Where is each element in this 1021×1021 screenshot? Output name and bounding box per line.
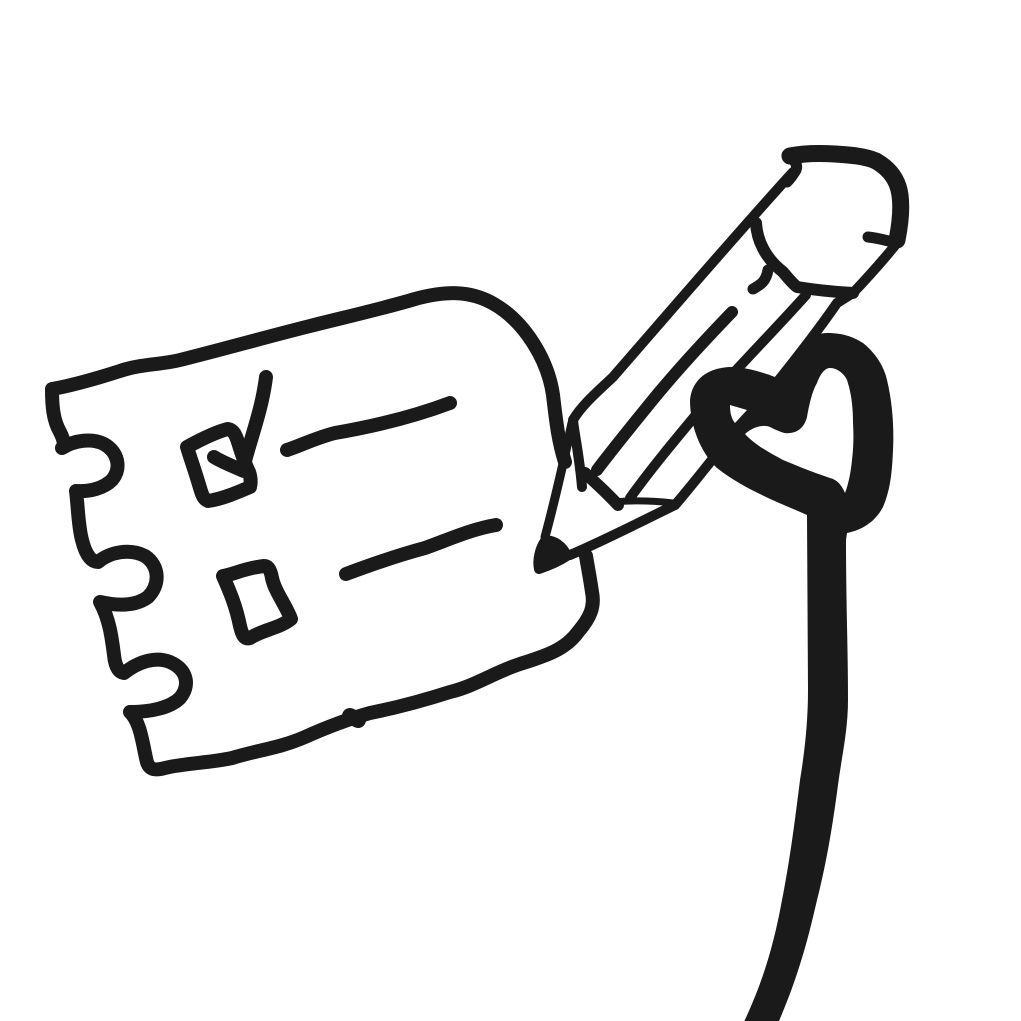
pencil base left xyxy=(585,473,618,505)
pencil cone right xyxy=(570,505,675,555)
pencil body left edge xyxy=(573,172,793,487)
eraser cap tick xyxy=(868,237,897,243)
icon: empty checkbox xyxy=(223,566,291,638)
text line: second checklist item xyxy=(346,525,496,574)
eraser cap hook xyxy=(787,155,797,182)
pencil ridge two xyxy=(630,295,806,498)
pencil base right xyxy=(615,501,673,503)
eraser ferrule xyxy=(756,223,853,293)
pencil cone left xyxy=(545,423,572,537)
ferrule tick xyxy=(753,270,768,289)
text line: first checklist item xyxy=(287,403,450,450)
pencil eraser cap xyxy=(790,153,901,240)
icon: small ink blot on notepad edge xyxy=(350,716,358,720)
panel: torn notepad outline xyxy=(52,293,593,769)
icon: ticked checkbox xyxy=(187,377,266,501)
icon: hand holding the pencil xyxy=(690,333,893,1021)
pencil ridge one xyxy=(597,312,732,470)
pencil body right edge xyxy=(675,243,897,505)
icon: pencil xyxy=(538,153,901,569)
pencil tip xyxy=(538,541,567,569)
